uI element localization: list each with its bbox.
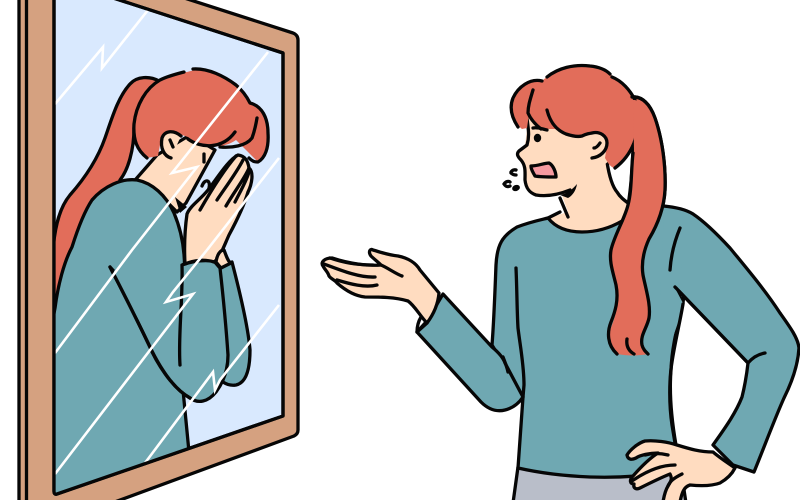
- ponytail outline: [609, 97, 665, 354]
- reflection: crying woman: [50, 69, 268, 497]
- hip hand finger lines: [632, 454, 682, 486]
- head face outline: [518, 118, 570, 196]
- reflection far sleeve: [222, 260, 252, 387]
- droplet 1: [511, 170, 516, 175]
- reflection torso: [50, 180, 189, 497]
- crack line 4: [145, 305, 279, 463]
- ear detail: [594, 143, 600, 148]
- spit droplets: [504, 170, 521, 192]
- droplet 2: [504, 181, 510, 187]
- arm on hip sleeve: [663, 206, 799, 472]
- arm on hip folds: [670, 228, 765, 363]
- hand on hip: [627, 441, 735, 500]
- crack line 2: [55, 52, 268, 353]
- reflection sleeve cover: [112, 240, 182, 380]
- reflection hands: [185, 155, 252, 264]
- head hair: [511, 66, 638, 168]
- raised arm sleeve: [417, 294, 523, 411]
- reflection finger lines: [200, 156, 249, 210]
- reflection ear: [161, 132, 181, 158]
- reflection closed eye: [202, 154, 206, 162]
- reflection nose bump: [202, 181, 209, 188]
- reflection neck and face: [136, 135, 215, 212]
- reflection hair outline: [134, 69, 268, 162]
- mirror glass: [54, 0, 283, 494]
- raised hand creases: [324, 258, 402, 286]
- raised hand shape: [322, 249, 439, 323]
- bangs line: [528, 90, 594, 136]
- reflection near sleeve: [110, 250, 228, 401]
- trousers: [513, 467, 686, 500]
- mirror: [19, 0, 298, 500]
- mirror cracks: [55, 10, 279, 474]
- angry woman: [322, 65, 799, 500]
- crack line 3: [55, 158, 279, 474]
- crack line 1: [55, 10, 148, 104]
- reflection mouth shadow: [175, 197, 187, 213]
- reflection ponytail: [56, 76, 159, 294]
- hip hand shape: [627, 441, 735, 500]
- jaw shadow: [560, 184, 577, 198]
- ponytail fill: [608, 100, 665, 356]
- droplet 3: [511, 184, 521, 192]
- ponytail front strand: [608, 97, 665, 356]
- reflection ear detail: [170, 140, 173, 147]
- mirror frame: [19, 0, 298, 500]
- torso left fold: [516, 268, 524, 397]
- raised arm fold: [503, 357, 508, 372]
- torso right line: [670, 304, 683, 443]
- torso: [492, 206, 693, 477]
- reflection bangs: [188, 118, 257, 147]
- arm on hip fill fix: [660, 208, 693, 340]
- angry mouth: [531, 163, 556, 177]
- head face: [517, 100, 610, 195]
- glass outline over reflection: [54, 0, 283, 494]
- reflection hair: [134, 70, 268, 162]
- neck: [548, 160, 630, 232]
- frame side edge: [25, 0, 28, 500]
- ponytail back behind head: [608, 97, 665, 354]
- reflection sleeve lines: [110, 265, 190, 398]
- eyebrow: [533, 128, 547, 130]
- neck front line: [548, 162, 628, 218]
- raised cuff: [417, 317, 427, 332]
- eye: [534, 134, 541, 142]
- raised hand: [322, 249, 439, 332]
- ear: [592, 133, 607, 158]
- reflection far wrist: [216, 250, 231, 268]
- head hair outline: [511, 65, 638, 168]
